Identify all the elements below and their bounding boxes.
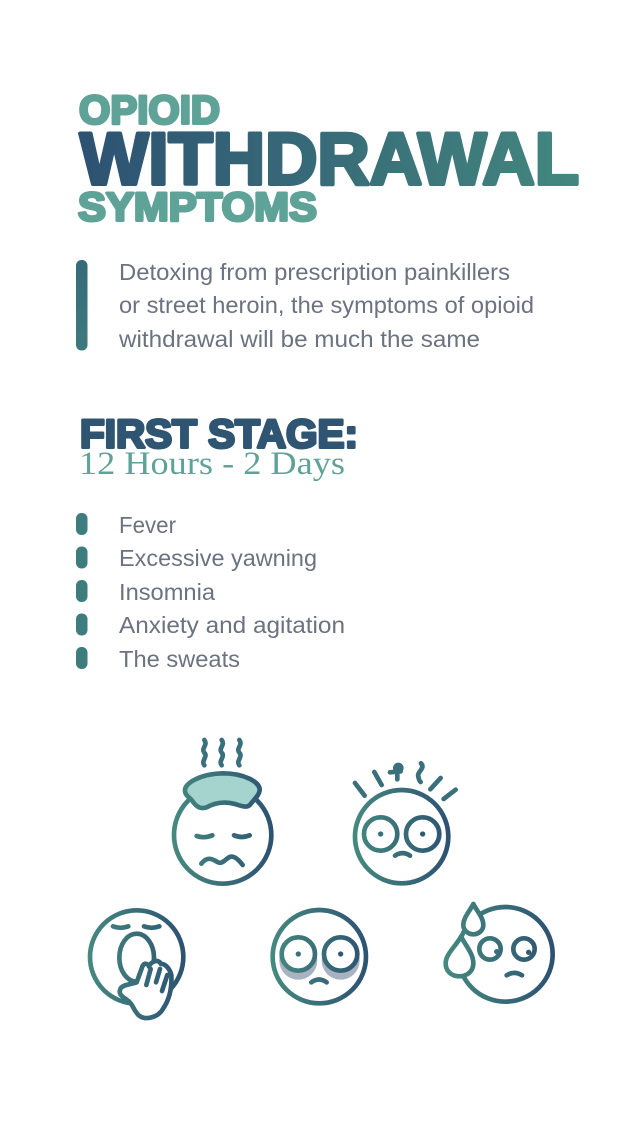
heading: first stage: FIRST STAGE: (80, 412, 358, 456)
stage heading (79, 412, 358, 482)
subheading: time range: 12 Hours - 2 Days (79, 446, 345, 482)
intro text: or street heroin, the symptoms of opioid (119, 292, 534, 318)
bullet: insomnia: Insomnia (119, 579, 216, 605)
bullet: anxiety: Anxiety and agitation (119, 612, 345, 638)
title line: opioid: OPIOID (79, 88, 220, 132)
intro block (76, 259, 541, 352)
icon: tired eyes face (273, 910, 366, 1003)
icon: insomnia face (355, 763, 456, 883)
bullet: fever (76, 512, 176, 538)
bullet: yawning: Excessive yawning (119, 545, 317, 571)
icon: yawning face (90, 910, 183, 1018)
bullet: fever: Fever (119, 512, 176, 538)
title line: withdrawal: WITHDRAWAL (80, 119, 579, 200)
icon: fever face (174, 740, 271, 884)
bullet: sweats: The sweats (119, 646, 240, 672)
bullet: insomnia (76, 579, 216, 605)
title (78, 88, 579, 230)
title line: symptoms: SYMPTOMS (78, 186, 317, 230)
intro text: Detoxing from prescription painkillers (119, 259, 510, 285)
icon: sweating face (446, 904, 553, 1002)
eye bags (279, 942, 360, 980)
symptom list (76, 512, 345, 672)
intro text: withdrawal will be much the same (118, 326, 480, 352)
accent bar (76, 260, 88, 350)
